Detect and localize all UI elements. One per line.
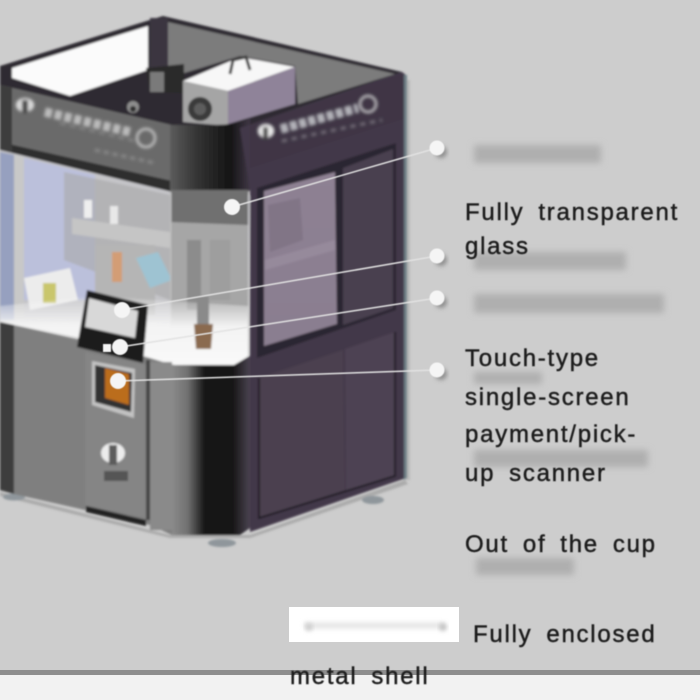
caption: fully enclosed metal shell: Fully enclosed [473,621,656,648]
roof interior [0,16,405,128]
caption: touch-type scanner: single-screen [465,384,630,411]
right header logo [258,96,382,141]
caption: touch-type scanner [465,345,637,487]
white roof panel [12,26,148,96]
touch screen terminal [77,290,148,363]
cup outlet [92,361,135,418]
front logo [101,443,128,481]
corner top [170,118,250,200]
white counter [0,296,248,365]
caption: fully transparent glass: glass [465,233,530,260]
black rounded corner [172,356,250,535]
callout dots [103,140,444,389]
floor shadow and feet [0,80,410,547]
caption: fully transparent glass [465,199,679,260]
kiosk illustration [0,16,410,547]
glass display area [0,150,250,326]
caption: fully enclosed metal shell [290,621,656,690]
coffee dispenser and cup [194,296,213,349]
blurred original captions [474,145,664,575]
upper right panel [343,149,393,325]
bottom strip [0,670,700,700]
caption: fully enclosed metal shell: metal shell [290,663,429,690]
caption: touch-type scanner: Touch-type [465,345,600,372]
legend swatch [289,607,459,642]
caption: out of the cup: Out of the cup [465,531,657,558]
header logo [16,98,155,163]
lower door left [259,350,345,518]
lower door right [345,332,395,491]
front header band [0,85,172,192]
right edge highlight [404,75,407,480]
dot shadows [435,146,447,380]
back wall [168,22,395,104]
roof camera part [146,64,184,93]
callout lines [118,148,437,381]
upper door frame [257,143,396,358]
white box unit [183,57,295,126]
window [264,172,337,346]
captions [465,199,679,558]
caption: touch-type scanner: payment/pick- [465,421,637,448]
caption: touch-type scanner: up scanner [465,460,607,487]
lower front cabinet [0,322,172,535]
rear post [150,18,168,70]
caption: fully transparent glass: Fully transparent [465,199,679,226]
right face [240,72,407,532]
